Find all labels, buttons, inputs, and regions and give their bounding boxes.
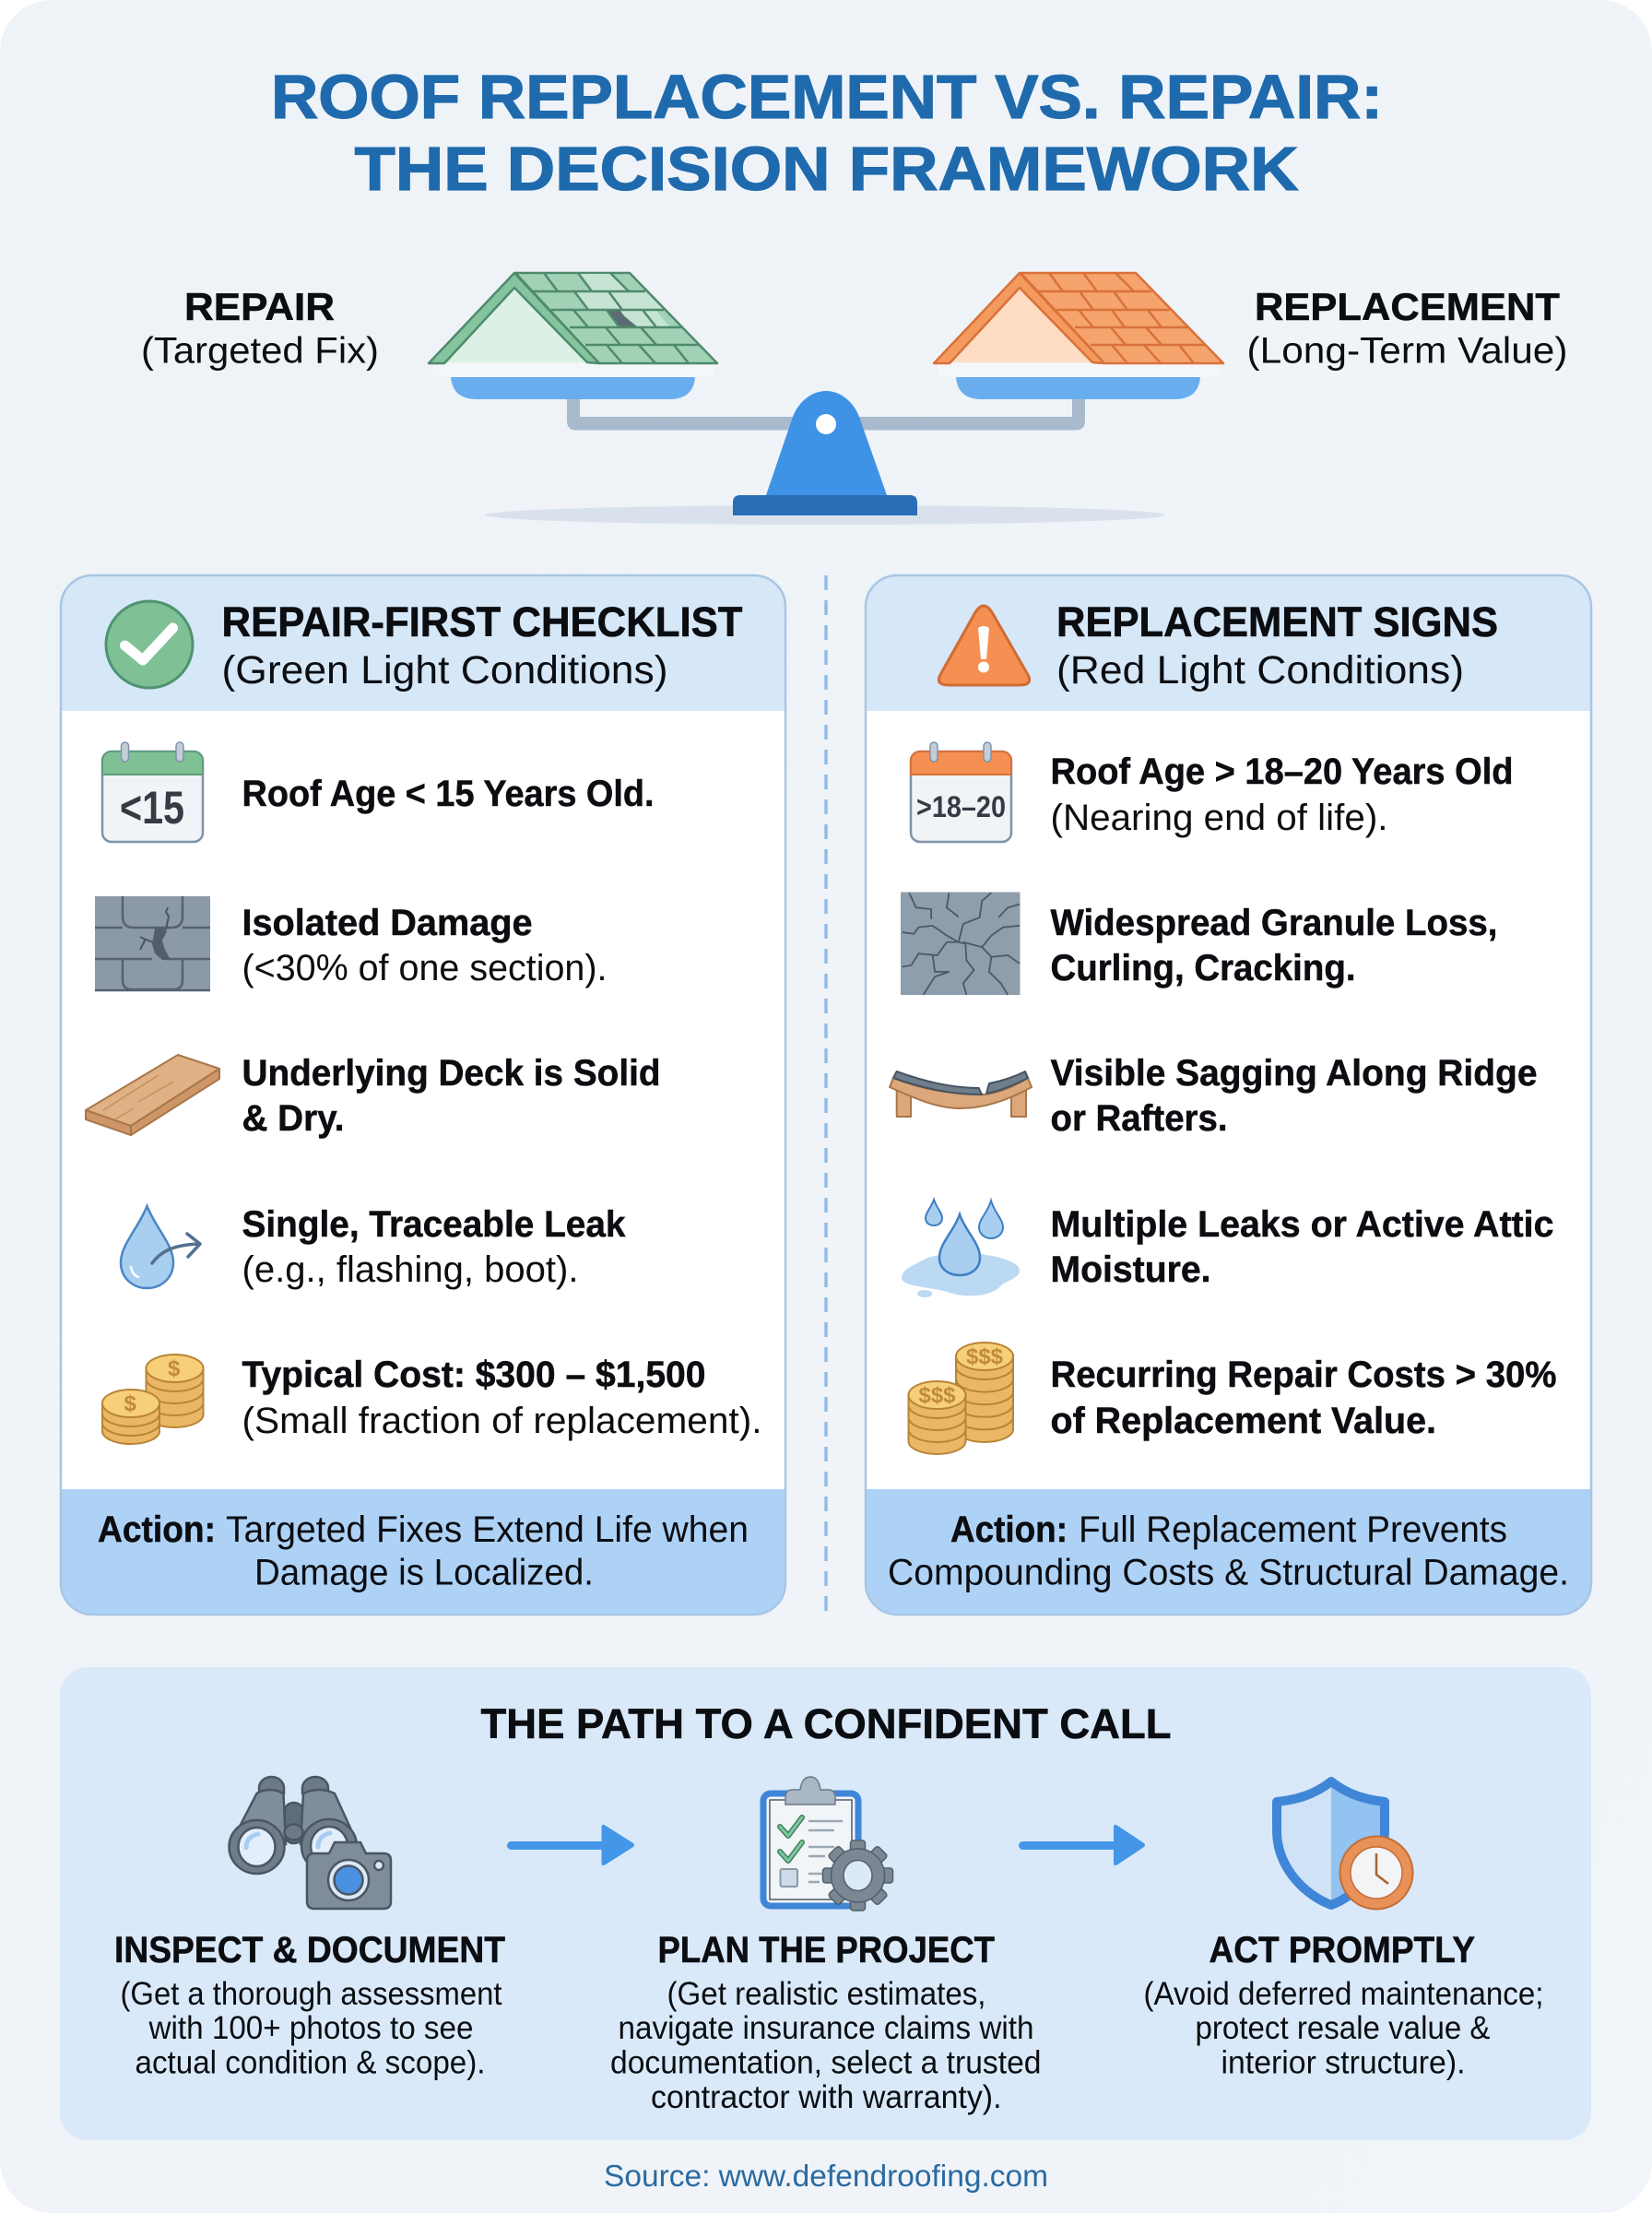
icon: check circle (106, 601, 193, 688)
icon: isolated shingle damage (95, 896, 210, 991)
action: replacement: Full Replacement Prevents (1079, 1509, 1507, 1550)
item: visible sagging: Visible Sagging Along Ridge (1051, 1053, 1538, 1094)
step 1 text: (Get a thorough assessment (120, 1976, 502, 2012)
item: roof age: (Nearing end of life). (1051, 798, 1388, 838)
item: widespread granule loss: Widespread Granule Loss, (1051, 903, 1497, 943)
action: replacement: Action: (950, 1509, 1068, 1550)
icon: coins (102, 1355, 203, 1444)
item: widespread granule loss (1051, 903, 1497, 988)
icon: large coin stacks (909, 1343, 1013, 1454)
step 2 text (610, 1930, 1042, 2115)
action: repair: Targeted Fixes Extend Life when (226, 1509, 749, 1550)
item: multiple leaks: Moisture. (1051, 1249, 1211, 1290)
label: repair (141, 285, 379, 371)
label: replacement: (Long-Term Value) (1246, 330, 1567, 371)
label: replacement (1246, 285, 1567, 371)
panel header: repair (61, 575, 785, 711)
item: underlying deck: Underlying Deck is Solid (242, 1053, 660, 1094)
panel header: replacement (866, 575, 1591, 711)
step 1 text: actual condition & scope). (135, 2045, 485, 2080)
item: roof age (1051, 751, 1514, 838)
arrow 1 (507, 1825, 634, 1865)
panel footer: replacement action (866, 1489, 1591, 1615)
panel: replacement signs (866, 575, 1591, 1615)
heading: replacement signs (1056, 598, 1498, 692)
step 3 text: protect resale value & (1195, 2010, 1490, 2046)
action: replacement: Compounding Costs & Structural Damage. (888, 1553, 1569, 1593)
item: visible sagging (1051, 1053, 1538, 1139)
icon: calendar under 15: <15 (120, 782, 184, 834)
icon: calendar under 15 (102, 742, 203, 842)
step 2 text: (Get realistic estimates, (667, 1976, 986, 2012)
step 3 text: ACT PROMPTLY (1210, 1930, 1475, 1970)
heading: replacement signs: REPLACEMENT SIGNS (1056, 598, 1498, 645)
step 1 text: with 100+ photos to see (148, 2010, 474, 2046)
title (271, 63, 1383, 204)
item: single leak: Single, Traceable Leak (242, 1204, 626, 1245)
item: recurring repair costs (1051, 1355, 1556, 1441)
step 1 text: INSPECT & DOCUMENT (114, 1930, 505, 1970)
item: typical cost: Typical Cost: $300 – $1,500 (242, 1355, 706, 1395)
item: widespread granule loss: Curling, Cracking. (1051, 948, 1355, 988)
icon: orange roof (934, 273, 1223, 363)
heading: path: THE PATH TO A CONFIDENT CALL (481, 1700, 1171, 1747)
icon: sagging roof (890, 1071, 1032, 1117)
icon: wood plank (86, 1055, 219, 1135)
action: repair: Action: (98, 1509, 216, 1550)
step 3 text: interior structure). (1221, 2045, 1466, 2080)
heading: repair-first checklist: (Green Light Conditions) (221, 648, 667, 692)
icon: large coin stacks: $$$ (966, 1344, 1004, 1369)
icon: warning triangle (938, 606, 1030, 685)
item: multiple leaks: Multiple Leaks or Active Attic (1051, 1204, 1554, 1245)
icon: water drop with arrow (121, 1206, 200, 1288)
icon: clipboard and gear (763, 1777, 892, 1911)
icon: large coin stacks: $$$ (918, 1383, 956, 1408)
item: single leak: (e.g., flashing, boot). (242, 1249, 579, 1290)
icon: binoculars and camera (229, 1777, 391, 1909)
item: roof age: Roof Age > 18–20 Years Old (1051, 751, 1514, 792)
icon: multiple drops and puddle (902, 1200, 1020, 1297)
icon: green roof (429, 273, 717, 363)
panel: repair-first checklist (61, 575, 785, 1615)
step 1 text (114, 1930, 505, 2080)
arrow 2 (1019, 1825, 1145, 1865)
icon: calendar over 18-20 (911, 742, 1011, 842)
step 2 text: contractor with warranty). (651, 2079, 1001, 2115)
item: recurring repair costs: Recurring Repair Costs > 30% (1051, 1355, 1556, 1395)
item: isolated damage (242, 903, 607, 988)
item: isolated damage: Isolated Damage (242, 903, 533, 943)
heading: repair-first checklist (221, 598, 743, 692)
step 3 text (1143, 1930, 1543, 2080)
step 2 text: documentation, select a trusted (610, 2045, 1042, 2080)
divider (824, 575, 828, 1614)
item: visible sagging: or Rafters. (1051, 1098, 1228, 1139)
step 2 text: PLAN THE PROJECT (658, 1930, 995, 1970)
action: repair: Damage is Localized. (254, 1553, 594, 1593)
panel: the path to a confident call (60, 1667, 1591, 2140)
item: single leak (242, 1204, 626, 1290)
title: THE DECISION FRAMEWORK (354, 135, 1298, 204)
item: recurring repair costs: of Replacement Value. (1051, 1401, 1436, 1441)
step 2 text: navigate insurance claims with (618, 2010, 1034, 2046)
source: Source: www.defendroofing.com (604, 2159, 1048, 2193)
balance scale (433, 363, 1220, 525)
item: isolated damage: (<30% of one section). (242, 948, 607, 988)
icon: cracked shingle (901, 893, 1020, 995)
label: replacement: REPLACEMENT (1255, 285, 1560, 328)
action: replacement (888, 1509, 1569, 1593)
heading: replacement signs: (Red Light Conditions) (1056, 648, 1464, 692)
item: typical cost (242, 1355, 761, 1441)
icon: coins: $ (168, 1356, 181, 1381)
item: underlying deck: & Dry. (242, 1098, 345, 1139)
icon: coins: $ (124, 1391, 136, 1416)
label: repair: (Targeted Fix) (141, 330, 379, 371)
action: repair (98, 1509, 749, 1593)
icon: calendar over 18-20: >18–20 (916, 790, 1006, 823)
panel footer: repair action (61, 1489, 785, 1615)
icon: shield and clock (1277, 1781, 1412, 1909)
heading: repair-first checklist: REPAIR-FIRST CHECKLIST (221, 598, 743, 645)
item: roof age: Roof Age < 15 Years Old. (242, 774, 655, 814)
label: repair: REPAIR (184, 285, 335, 328)
step 3 text: (Avoid deferred maintenance; (1143, 1976, 1543, 2012)
title: ROOF REPLACEMENT VS. REPAIR: (271, 63, 1383, 132)
item: underlying deck (242, 1053, 660, 1139)
item: typical cost: (Small fraction of replacement). (242, 1401, 761, 1441)
item: multiple leaks (1051, 1204, 1554, 1290)
